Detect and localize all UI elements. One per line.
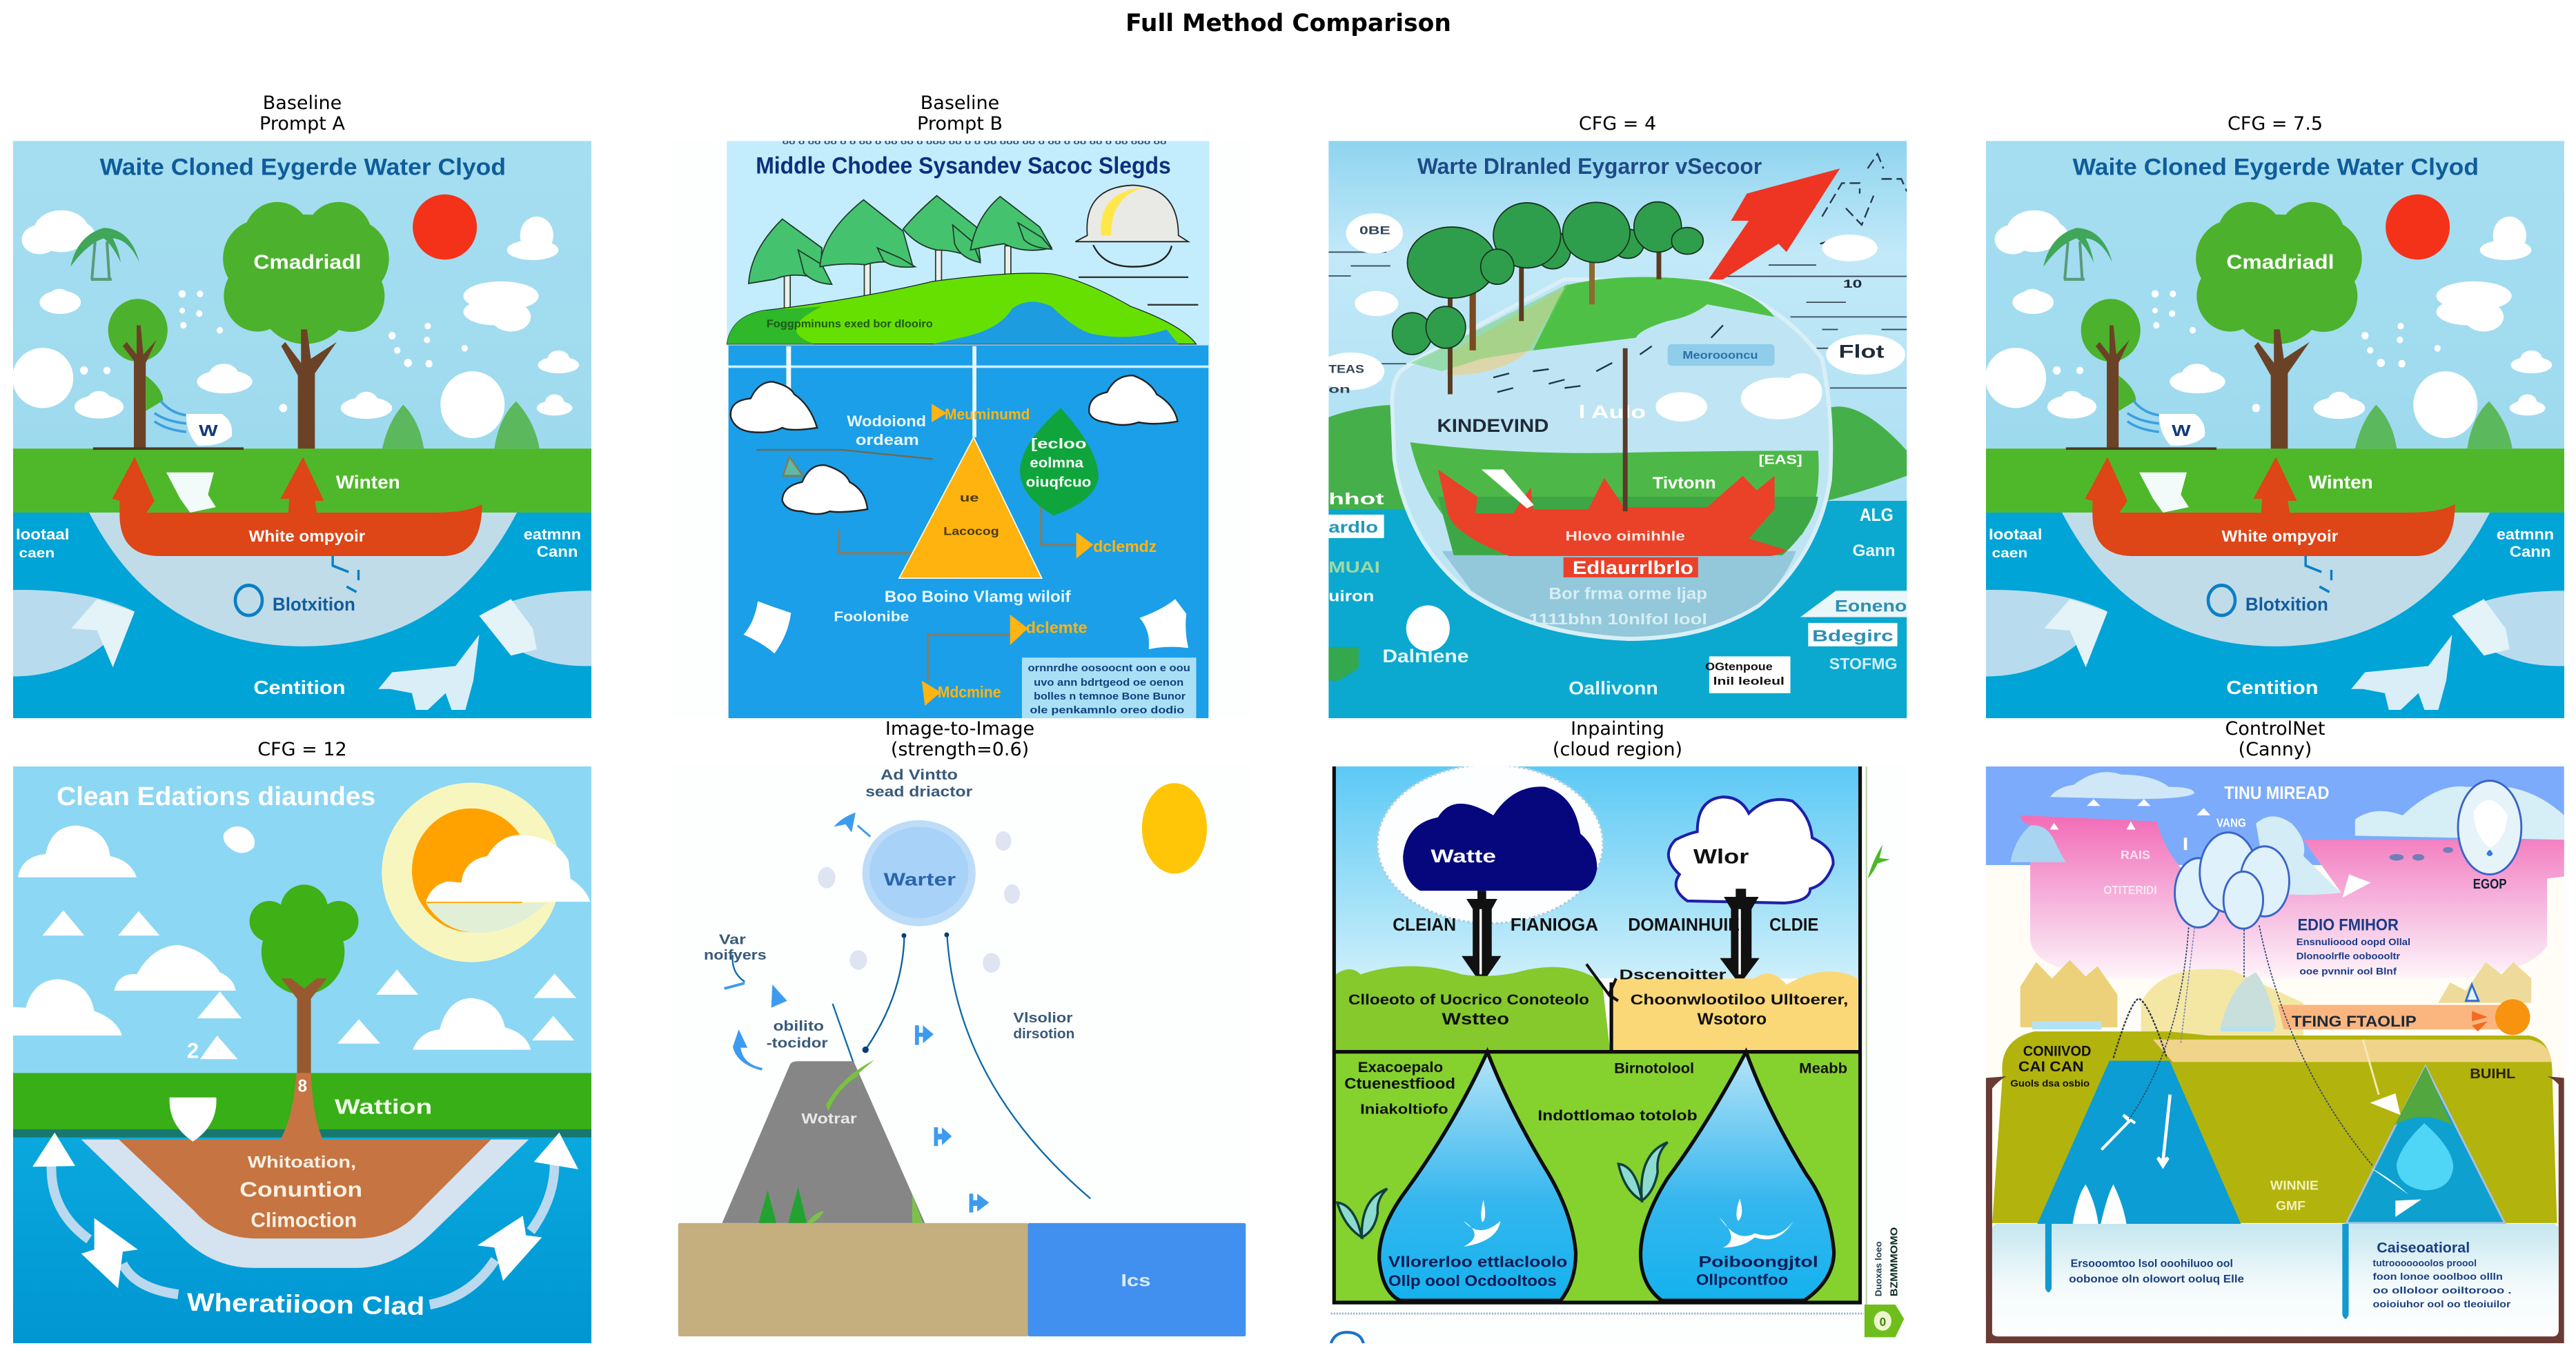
wave lines and speech bubble bbox=[2127, 401, 2205, 446]
side labels: dirsotion bbox=[1013, 1027, 1074, 1042]
icon: sun bbox=[413, 195, 477, 259]
red and green labels: [EAS] bbox=[1759, 453, 1802, 467]
bottom and side labels: Eoneno bbox=[1835, 597, 1907, 616]
left label block bbox=[2010, 1043, 2091, 1089]
left label block: Guols dsa osbio bbox=[2010, 1078, 2090, 1089]
dark cloud halo bbox=[1377, 764, 1603, 923]
droplet balloon: EGOP bbox=[2473, 877, 2507, 892]
orange tag arrows: dclemdz bbox=[1093, 537, 1157, 555]
heading: Image-to-Image: (strength=0.6) bbox=[891, 739, 1029, 760]
bottom right text: tutrooooooolos proool bbox=[2373, 1257, 2477, 1269]
EDIO text block bbox=[2297, 915, 2410, 976]
orange cross-section bbox=[2085, 457, 2455, 556]
bowl bbox=[2062, 513, 2490, 646]
heading: Baseline Prompt B: Baseline bbox=[921, 92, 999, 114]
water inlet under hill bbox=[933, 301, 1179, 344]
bottom and side labels bbox=[1328, 224, 1907, 699]
icon: palm bbox=[70, 228, 139, 279]
info box: ornnrdhe oosoocnt oon e oou bbox=[1028, 663, 1190, 674]
olive labels: WINNIE bbox=[2270, 1178, 2319, 1192]
upper text: Dscenoitter bbox=[1620, 967, 1727, 982]
orange cross-section bbox=[112, 457, 482, 556]
panel: ControlNet bbox=[1986, 766, 2564, 1343]
bottom right text: oo olloloor ooiltorooo . bbox=[2373, 1285, 2511, 1296]
sky labels: DOMAINHUIE bbox=[1628, 915, 1740, 935]
upper text bbox=[1348, 967, 1848, 1028]
image title text: Warte Dlranled Eygarror vSecoor bbox=[1417, 153, 1762, 179]
sky labels: TINU MIREAD bbox=[2224, 784, 2329, 803]
label: Winten: Winten bbox=[2309, 471, 2373, 493]
grey mountain: Wotrar bbox=[801, 1111, 857, 1127]
labels in globe: Meoroooncu bbox=[1682, 350, 1758, 361]
frame bbox=[1334, 766, 1860, 1302]
info box: ole penkamnlo oreo dodio bbox=[1030, 705, 1184, 716]
small birds bbox=[2390, 847, 2453, 860]
white arrow stroke bbox=[1482, 470, 1534, 508]
orange tag arrows: dclemte bbox=[1026, 619, 1088, 637]
blue icon and label bbox=[235, 556, 358, 615]
EDIO text block: Ensnulioood oopd Ollal bbox=[2297, 936, 2410, 947]
blue icon and label bbox=[2208, 556, 2331, 615]
sky clouds bbox=[2010, 772, 2564, 895]
pink bands bbox=[2021, 815, 2564, 978]
side labels: Iootaal bbox=[16, 526, 69, 543]
bottom and side labels: MUAI bbox=[1328, 559, 1380, 576]
orange triangle: ue bbox=[960, 491, 979, 504]
lower labels bbox=[834, 588, 1071, 625]
side labels bbox=[704, 932, 1074, 1051]
green ground bbox=[1336, 967, 1610, 1052]
bottom and side labels: ALG bbox=[1860, 506, 1894, 525]
green text: Indottlomao totolob bbox=[1537, 1108, 1698, 1124]
bowl bbox=[89, 513, 517, 646]
bottom label: Wheratiioon Clad bbox=[187, 1287, 425, 1320]
green hills bbox=[382, 402, 540, 448]
info box: uvo ann bdrtgeod oe oenon bbox=[1034, 677, 1183, 689]
side labels: Iootaal bbox=[1989, 526, 2042, 543]
white cloud bbox=[1669, 797, 1833, 903]
pale puffs bbox=[818, 831, 1020, 973]
lower labels: Foolonibe bbox=[834, 609, 909, 625]
heading: CFG 12: CFG = 12 bbox=[257, 739, 347, 760]
orange tag arrows: Mdcmine bbox=[938, 683, 1001, 701]
sky labels bbox=[1393, 915, 1818, 935]
orange triangle bbox=[899, 437, 1042, 578]
right drop bbox=[1641, 1052, 1834, 1300]
icon: sun bbox=[2386, 195, 2450, 259]
sky lines bbox=[1328, 252, 1907, 388]
blue sky bbox=[1986, 766, 2564, 865]
soil labels bbox=[239, 1153, 362, 1232]
row of trees bbox=[749, 196, 1052, 313]
heading: CFG 7.5: CFG = 7.5 bbox=[2228, 113, 2323, 135]
blue pools bbox=[2032, 1021, 2274, 1031]
bowl bbox=[81, 1140, 529, 1268]
bottom and side labels: 10 bbox=[1843, 277, 1862, 290]
panel: image-to-image bbox=[671, 766, 1250, 1343]
blue icon and label: Blotxition bbox=[273, 593, 355, 615]
panel: CFG 12 bbox=[13, 766, 591, 1343]
side labels bbox=[1989, 526, 2554, 561]
dotted footer bbox=[1331, 1312, 1864, 1316]
left drop bbox=[1379, 1052, 1575, 1300]
sky labels: FIANIOGA bbox=[1511, 915, 1598, 935]
green hill bbox=[727, 273, 1197, 344]
blue mountain bbox=[2037, 999, 2241, 1224]
bottom and side labels: on bbox=[1328, 384, 1350, 396]
icon: white animal bbox=[378, 635, 480, 710]
bottom and side labels: TEAS bbox=[1328, 362, 1364, 376]
clouds bbox=[1317, 213, 1905, 651]
small tree bbox=[2081, 299, 2141, 448]
small v mark bbox=[1586, 964, 1618, 1001]
green text: Meabb bbox=[1799, 1060, 1847, 1076]
curved arrows bbox=[32, 1133, 578, 1305]
peach bar bbox=[2278, 984, 2530, 1035]
land band bbox=[1992, 1031, 2557, 1223]
left labels and pointer: Wodoiond bbox=[847, 413, 926, 430]
right edge strip and badge: BZMMMOMO bbox=[1889, 1227, 1900, 1296]
labels in globe: KINDEVIND bbox=[1437, 415, 1548, 436]
blue arc fragment bbox=[1331, 1332, 1364, 1343]
sky labels: OTITERIDI bbox=[2103, 883, 2157, 897]
bottom and side labels: Oallivonn bbox=[1569, 677, 1658, 699]
bottom and side labels: Bdegirc bbox=[1812, 627, 1894, 645]
label: Winten: Winten bbox=[336, 471, 400, 493]
bottom right text: foon lonoe ooolboo ollln bbox=[2373, 1271, 2503, 1282]
top text bbox=[865, 767, 972, 800]
big tree: Cmadriadl bbox=[2226, 251, 2334, 274]
yellow ground bbox=[1612, 971, 1858, 1052]
ground bbox=[13, 1073, 591, 1130]
EDIO text block: ooe pvnnir ool Blnf bbox=[2299, 965, 2397, 976]
trees bbox=[1393, 202, 1703, 394]
side labels: noifyers bbox=[704, 948, 767, 963]
heading: ControlNet: ControlNet bbox=[2225, 718, 2326, 740]
bottom and side labels: Dalnlene bbox=[1382, 645, 1468, 666]
dashed mountain lines bbox=[1820, 154, 1907, 244]
heading: Inpainting: (cloud region) bbox=[1553, 739, 1682, 760]
ground bbox=[13, 448, 591, 513]
panel: baseline prompt A bbox=[12, 141, 591, 718]
sky labels: VANG bbox=[2216, 815, 2246, 829]
sky labels: RAIS bbox=[2121, 848, 2150, 862]
droplet balloon bbox=[2458, 781, 2521, 892]
heading: Image-to-Image: Image-to-Image bbox=[885, 718, 1034, 740]
left labels and pointer bbox=[756, 413, 933, 476]
wave lines and speech bubble: W bbox=[199, 422, 219, 439]
label: White ompyoir: White ompyoir bbox=[2221, 527, 2339, 545]
blue arrows bbox=[724, 813, 989, 1212]
orange triangle: Lacocog bbox=[943, 524, 999, 538]
green text: Birnotolool bbox=[1614, 1060, 1694, 1076]
grey mountain bbox=[722, 1060, 925, 1223]
small line dots bbox=[863, 932, 949, 1053]
red and green labels: Tivtonn bbox=[1653, 474, 1716, 493]
olive labels: GMF bbox=[2276, 1198, 2305, 1213]
side green hills bbox=[1328, 405, 1907, 509]
bottom and side labels: 0BE bbox=[1359, 224, 1390, 237]
dark cloud: Watte bbox=[1430, 845, 1496, 866]
image title text: Waite Cloned Eygerde Water Clyod bbox=[2073, 155, 2479, 181]
clouds bbox=[731, 375, 1178, 514]
olive labels bbox=[2270, 1178, 2319, 1213]
divider bars bbox=[2045, 1224, 2349, 1319]
green text: Iniakoltiofo bbox=[1360, 1102, 1448, 1118]
side labels: Var bbox=[719, 932, 746, 948]
title: Full Method Comparison bbox=[1125, 10, 1451, 37]
shield bbox=[170, 1098, 217, 1142]
sun with cloud bbox=[382, 783, 590, 962]
side labels: -tocidor bbox=[767, 1036, 828, 1051]
sky clouds and white circles bbox=[12, 210, 579, 438]
white arrow on ground bbox=[166, 473, 216, 513]
pole bbox=[1623, 348, 1628, 511]
lower globe water bbox=[1442, 551, 1796, 637]
image title text: Waite Cloned Eygerde Water Clyod bbox=[100, 155, 506, 181]
faded globe text: Bor frma orme ljap bbox=[1548, 585, 1707, 604]
trunk number: 8 bbox=[298, 1077, 307, 1096]
forest bbox=[2021, 960, 2531, 1040]
right triangle with drop bbox=[2346, 1066, 2505, 1223]
dark cloud bbox=[1403, 786, 1597, 891]
white triangles on sky bbox=[2050, 799, 2371, 898]
water bubble bbox=[863, 820, 976, 927]
orange tag arrows bbox=[922, 404, 1157, 706]
bottom panels bbox=[1992, 1224, 2559, 1336]
top text: Ad Vintto bbox=[881, 767, 958, 783]
image title text: Middle Chodee Sysandev Sacoc Slegds bbox=[756, 153, 1171, 179]
white cloud: Wlor bbox=[1693, 846, 1749, 869]
wires from balloons bbox=[2130, 925, 2379, 1166]
icon: yellow sun bbox=[1142, 783, 1207, 873]
side labels: Cann bbox=[537, 544, 578, 560]
green lower bbox=[1334, 1052, 1860, 1301]
water bubble: Warter bbox=[884, 870, 956, 890]
sky labels: CLDIE bbox=[1769, 915, 1818, 935]
panel: inpainting bbox=[1328, 764, 1907, 1343]
panel: CFG 4 bbox=[1317, 141, 1907, 718]
soil labels: Whitoation, bbox=[248, 1153, 356, 1171]
black arrows bbox=[1462, 889, 1760, 984]
white triangles bbox=[42, 911, 576, 1059]
bottom left text bbox=[2069, 1258, 2244, 1285]
left label block: CAI CAN bbox=[2018, 1059, 2084, 1075]
heading: ControlNet: (Canny) bbox=[2239, 739, 2312, 760]
wave lines and speech bubble bbox=[155, 401, 232, 446]
tree crown bbox=[250, 884, 358, 995]
heading: Baseline Prompt A: Baseline bbox=[263, 92, 342, 114]
green drop with text: oiuqfcuo bbox=[1026, 475, 1091, 491]
bottom and side labels: uiron bbox=[1328, 588, 1374, 605]
upper text: Wstteo bbox=[1442, 1010, 1509, 1028]
globe dashes and pole bbox=[1493, 325, 1723, 392]
side labels bbox=[17, 528, 580, 557]
tan block bbox=[678, 1223, 1028, 1336]
big tree bbox=[2196, 202, 2362, 453]
side labels: Cann bbox=[2510, 544, 2550, 560]
clouds bbox=[13, 826, 531, 1050]
icon: sun in cloud bbox=[1075, 185, 1198, 305]
soil labels: Climoction bbox=[250, 1209, 357, 1232]
big tree bbox=[223, 202, 389, 453]
tree trunk and soil bbox=[119, 978, 491, 1238]
heading: CFG 4: CFG = 4 bbox=[1579, 113, 1656, 135]
white arrow on ground bbox=[2139, 473, 2189, 513]
label: Centition: Centition bbox=[253, 676, 346, 698]
green drop with text: [ecloo bbox=[1031, 437, 1087, 452]
bottom right text: ooioiuhor ool oo tleoiuilor bbox=[2373, 1298, 2511, 1309]
heading: Baseline Prompt A: Prompt A bbox=[259, 113, 345, 135]
green hills bbox=[2355, 402, 2513, 448]
faded globe text: 1111bhn 10nlfol lool bbox=[1529, 611, 1707, 628]
water bbox=[13, 513, 591, 718]
right drop: Ollpcontfoo bbox=[1696, 1271, 1788, 1289]
faded globe text bbox=[1529, 585, 1707, 628]
bottom left text: Ersooomtoo lsol ooohiluoo ool bbox=[2071, 1258, 2233, 1270]
bottom and side labels: OGtenpoue bbox=[1705, 661, 1773, 673]
left drop: Vllorerloo ettlacloolo bbox=[1388, 1253, 1567, 1271]
top text: sead driactor bbox=[865, 784, 972, 800]
right drop: Poiboongjtol bbox=[1698, 1253, 1818, 1271]
red tag: Edlaurrlbrlo bbox=[1573, 557, 1693, 578]
labels in globe bbox=[1437, 344, 1775, 436]
upper text: Clloeoto of Uocrico Conoteolo bbox=[1348, 992, 1589, 1008]
heading: Baseline Prompt B: Prompt B bbox=[917, 113, 1003, 135]
sky bbox=[1334, 766, 1860, 978]
peach bar: TFING FTAOLIP bbox=[2292, 1013, 2417, 1030]
brown frame bbox=[1986, 1076, 2564, 1343]
bottom and side labels: lnil leoleul bbox=[1713, 675, 1784, 688]
heading: Inpainting: Inpainting bbox=[1571, 718, 1664, 740]
bottom and side labels: ardlo bbox=[1328, 519, 1378, 536]
icon: palm bbox=[2043, 228, 2112, 279]
white pillows bbox=[743, 599, 1188, 653]
lower labels: Boo Boino Vlamg wiloif bbox=[885, 588, 1071, 606]
red and green labels bbox=[1566, 453, 1802, 544]
green text: Exacoepalo bbox=[1358, 1060, 1443, 1076]
big tree: Cmadriadl bbox=[253, 251, 361, 274]
blue icon and label: Blotxition bbox=[2245, 593, 2328, 615]
EDIO text block: EDIO FMIHOR bbox=[2298, 915, 2399, 934]
water bbox=[13, 1138, 591, 1343]
hill text: Foggpminuns exed bor dlooiro bbox=[767, 318, 933, 330]
water body bbox=[729, 346, 1208, 718]
upper text: Wsotoro bbox=[1698, 1010, 1767, 1028]
faint top text: oo o oo oo o o oo o oo oo o ooo oo o o oo ooo oo o oo o oo oo o oo ooo oo bbox=[783, 138, 1167, 146]
wave lines and speech bubble: W bbox=[2172, 422, 2192, 439]
connector lines bbox=[839, 505, 1076, 681]
left labels and pointer: ordeam bbox=[856, 431, 919, 448]
bottom right text: Caiseoatioral bbox=[2377, 1240, 2470, 1256]
soil labels: Conuntion bbox=[239, 1178, 362, 1202]
right edge strip and badge: 0 bbox=[1880, 1315, 1886, 1329]
orange tag arrows: Meuminumd bbox=[945, 406, 1030, 423]
panel: baseline prompt B bbox=[671, 138, 1250, 718]
side labels: Vlsolior bbox=[1013, 1011, 1073, 1026]
red arrow bbox=[1708, 168, 1840, 280]
clouds in globe bbox=[1655, 373, 1822, 422]
bunhl label: BUIHL bbox=[2470, 1067, 2515, 1082]
side labels: obilito bbox=[773, 1019, 824, 1034]
right edge strip and badge: Duoxas loeo bbox=[1874, 1241, 1884, 1296]
labels in globe: l Aulo bbox=[1578, 403, 1646, 422]
green soil bbox=[1410, 442, 1819, 555]
blue block: Ics bbox=[1121, 1271, 1150, 1291]
bottom and side labels: STOFMG bbox=[1829, 655, 1898, 673]
balloon cluster bbox=[2175, 833, 2289, 929]
bottom left text: oobonoe oln olowort ooluq Elle bbox=[2069, 1274, 2244, 1285]
sky clouds and white circles bbox=[1985, 210, 2552, 438]
EDIO text block: Dlonoolrfle ooboooltr bbox=[2297, 950, 2401, 962]
info box: bolles n temnoe Bone Bunor bbox=[1034, 691, 1186, 702]
ground bbox=[1986, 448, 2564, 513]
side lens shapes with arrows bbox=[1986, 590, 2564, 677]
sky labels bbox=[2103, 784, 2329, 897]
bottom and side labels: Gann bbox=[1853, 542, 1896, 560]
icon: white animal bbox=[2351, 635, 2452, 710]
curved lines from bubble bbox=[733, 935, 1090, 1198]
island green bbox=[1533, 277, 1775, 350]
green text bbox=[1344, 1060, 1847, 1124]
side labels: eatmnn bbox=[2497, 526, 2554, 543]
bottom and side labels: Flot bbox=[1839, 341, 1885, 362]
green text: Ctuenestfiood bbox=[1344, 1075, 1455, 1092]
side labels: caen bbox=[19, 546, 55, 561]
sky labels: CLEIAN bbox=[1393, 915, 1456, 935]
right edge strip and badge bbox=[1865, 766, 1904, 1337]
left drop: Ollp oool Ocdooltoos bbox=[1388, 1272, 1557, 1289]
left label block: CONIIVOD bbox=[2023, 1043, 2091, 1060]
side labels: eatmnn bbox=[524, 526, 581, 543]
glass globe bbox=[1392, 279, 1831, 639]
image title text: Clean Edations diaundes bbox=[57, 782, 375, 811]
side labels: caen bbox=[1992, 546, 2027, 561]
blue block bbox=[1028, 1223, 1246, 1336]
info box bbox=[1022, 657, 1197, 718]
bottom and side labels: hhot bbox=[1328, 490, 1384, 508]
bottom right text bbox=[2373, 1240, 2511, 1309]
small tree bbox=[108, 299, 168, 448]
leaves bbox=[1337, 1142, 1668, 1238]
label: White ompyoir: White ompyoir bbox=[248, 527, 366, 545]
green drop with text bbox=[1020, 408, 1099, 515]
red and green labels: Hlovo oimihhle bbox=[1566, 529, 1685, 544]
number 2: 2 bbox=[187, 1038, 199, 1063]
label: Centition: Centition bbox=[2226, 676, 2319, 698]
water bbox=[1986, 513, 2564, 718]
red cross-section bbox=[1438, 470, 1787, 556]
panel: CFG 7.5 bbox=[1985, 141, 2564, 718]
label: Wattion: Wattion bbox=[335, 1096, 432, 1119]
upper text: Choonwlootiloo Ulltoerer, bbox=[1631, 992, 1848, 1008]
side lens shapes with arrows bbox=[13, 590, 591, 677]
green drop with text: eolmna bbox=[1030, 455, 1084, 471]
